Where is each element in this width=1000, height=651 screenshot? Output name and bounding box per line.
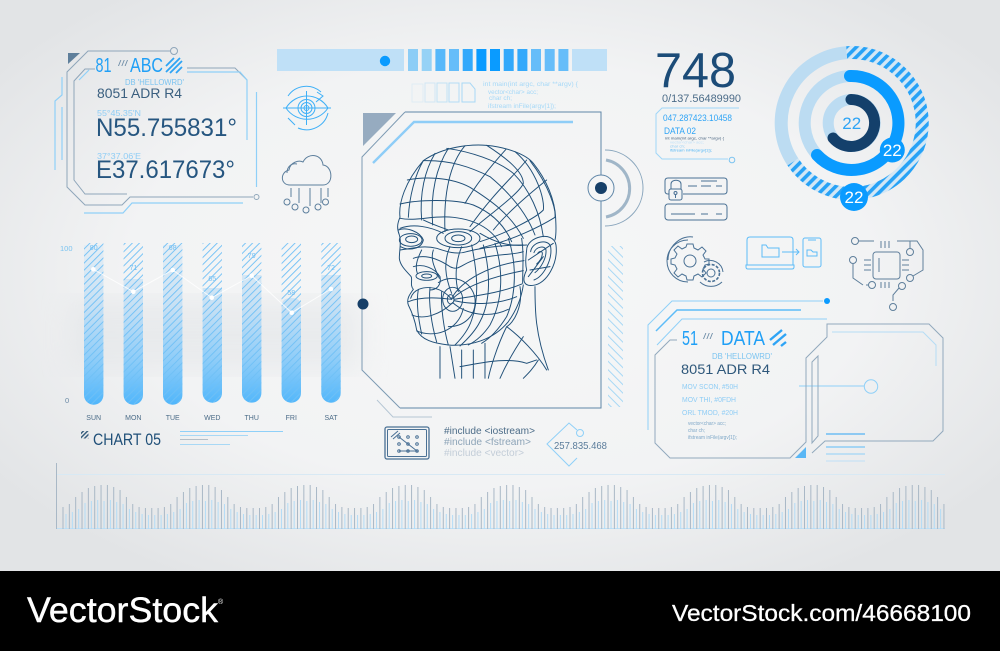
value labels: 58: [287, 290, 295, 297]
panel: data 02: DATA 02: [664, 126, 696, 137]
panel: data 02: char ch;: [670, 144, 685, 148]
mid-face flow: [413, 252, 523, 268]
heading: 51 DATA: ///: [703, 332, 714, 341]
panel: data 02: int main(int argc, char **argv) {: [665, 136, 725, 140]
value labels: 65: [208, 276, 216, 283]
code: include lines: #include <iostream>: [444, 426, 535, 437]
value labels: 80: [90, 245, 98, 252]
icon: cloud network: [282, 156, 331, 213]
diamond readout: 257.835.468: [554, 440, 607, 452]
coordinates text: 8051 ADR R4: [97, 86, 182, 101]
ear: [524, 236, 556, 285]
code: include lines: #include <fstream>: [444, 437, 531, 448]
value labels: [90, 245, 335, 297]
donut chart: [781, 53, 922, 211]
donut chart: 22: [845, 188, 863, 207]
data text: MOV THI, #0FDH: [682, 395, 736, 404]
panel: data 02: ifstream inFile(argv[1]);: [670, 148, 712, 152]
day labels: MON: [125, 415, 141, 422]
day labels: FRI: [286, 415, 297, 422]
coordinates text: DB 'HELLOWRD': [125, 77, 184, 87]
icon: eye: [283, 86, 331, 130]
footer bar: [0, 571, 1000, 651]
counter 748: 0/137.56489990: [662, 93, 741, 105]
value labels: 68: [169, 245, 177, 252]
heading: 51 DATA: [682, 328, 766, 350]
neck: [440, 287, 548, 378]
axis labels: 0: [65, 396, 69, 405]
hatched strip: [608, 246, 623, 407]
waveform: [56, 463, 972, 529]
heading: 51 DATA: 51: [682, 328, 698, 350]
cranium latitudes: [400, 200, 512, 242]
eyes: [452, 235, 465, 242]
heading: 81 ABC: ABC: [130, 55, 163, 77]
day labels: THU: [245, 415, 259, 422]
coordinates text: 55°45.35'N: [97, 108, 141, 118]
diamond readout: [547, 423, 607, 466]
day labels: [86, 415, 338, 422]
panel: data 02: vector<char> acc;: [670, 140, 704, 144]
counter 748: 748: [655, 44, 736, 98]
trend line: [91, 267, 333, 315]
coordinates text: E37.617673°: [96, 156, 235, 184]
value labels: 72: [327, 265, 335, 272]
panel: main face frame: [358, 112, 643, 417]
donut chart: 22: [883, 141, 902, 160]
bottom icon: pattern lock screen: [385, 427, 429, 459]
panel: coordinates: [55, 48, 259, 213]
heading: 51 DATA: DATA: [721, 328, 766, 350]
cheek rings: [447, 295, 454, 304]
footer bar: VectorStock.com/46668100: [672, 600, 971, 626]
panel: data: [648, 298, 943, 461]
target marker: [588, 150, 643, 226]
code snippet top: ifstream inFile(argv[1]);: [488, 104, 556, 110]
head outline: [398, 145, 556, 345]
coordinates text: 37°37.06'E: [97, 151, 141, 161]
data text: ifstream inFile(argv[1]);: [688, 435, 737, 441]
data text: char ch;: [688, 428, 705, 434]
data text: MOV SCON, #50H: [682, 382, 738, 391]
panel: data 02: 047.287423.10458: [663, 113, 732, 124]
coordinates text: [96, 77, 237, 184]
axis labels: 100: [60, 244, 73, 253]
face wireframe: [398, 145, 556, 378]
code snippet top: [483, 82, 578, 110]
data text: DB 'HELLOWRD': [712, 351, 772, 361]
day labels: SUN: [86, 415, 101, 422]
day labels: SAT: [324, 415, 338, 422]
day labels: WED: [204, 415, 220, 422]
data text: ORL TMOD, #20H: [682, 408, 738, 417]
top progress bar: [277, 49, 607, 71]
icon: circuit chip: [850, 238, 923, 310]
icon: laptop phone transfer: [746, 237, 821, 269]
heading: 81 ABC: 81: [96, 55, 112, 77]
code snippet top: int main(int argc, char **argv) {: [483, 82, 578, 88]
heading: chart 05: [81, 430, 283, 449]
heading: chart 05: CHART 05: [93, 430, 161, 449]
icon: gears: [667, 237, 723, 286]
bars: [84, 243, 341, 405]
value labels: 71: [130, 265, 137, 272]
icon: lock forms: [665, 178, 727, 220]
axis labels: [60, 244, 73, 405]
data text: 8051 ADR R4: [681, 361, 770, 377]
code snippet top: vector<char> acc;: [488, 90, 538, 96]
code snippet top: char ch;: [489, 96, 512, 102]
nose and mouth: [416, 272, 437, 280]
value labels: 79: [248, 253, 256, 260]
heading: 81 ABC: ///: [118, 59, 129, 68]
footer bar: VectorStock: [27, 591, 219, 630]
code: include lines: #include <vector>: [444, 448, 524, 459]
panel: data 02: [656, 108, 739, 163]
heading: 81 ABC: [96, 55, 163, 77]
code: include lines: [444, 426, 535, 459]
footer bar: ®: [218, 598, 224, 606]
data text: vector<char> acc;: [688, 421, 726, 427]
data text: [681, 351, 772, 441]
day labels: TUE: [166, 415, 180, 422]
cranium meridians: [408, 161, 423, 217]
donut chart: 22: [842, 114, 861, 133]
coordinates text: N55.755831°: [96, 114, 237, 142]
bar chart: [60, 243, 341, 422]
icon: document tabs: [412, 83, 475, 102]
